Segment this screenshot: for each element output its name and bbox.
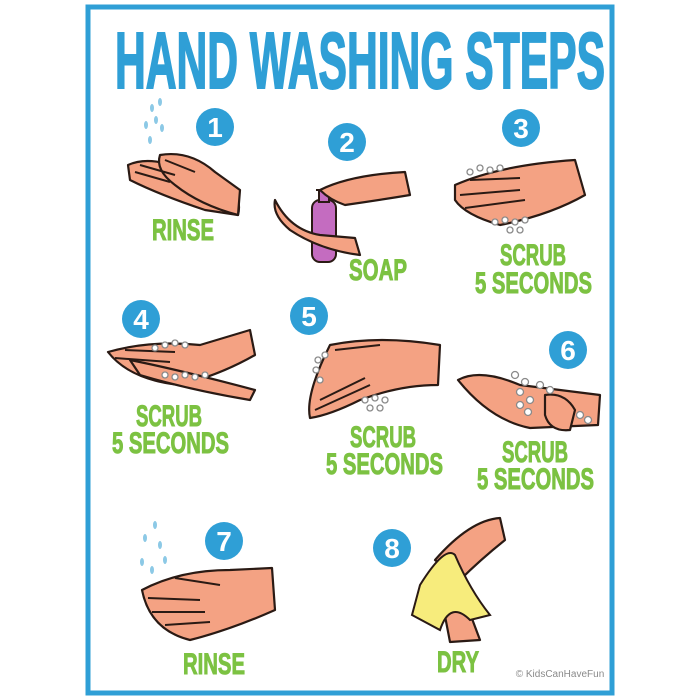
step 7: rinse	[140, 521, 275, 681]
label: scrub 5 seconds: 5 SECONDS	[477, 463, 594, 496]
icon: water drops	[140, 521, 167, 574]
number badge 8	[373, 529, 411, 567]
number badge 5: 5	[301, 301, 317, 332]
label: soap: SOAP	[349, 254, 407, 287]
step 2: soap	[275, 123, 410, 287]
label: scrub 5 seconds: SCRUB	[502, 436, 568, 469]
number badge 5	[290, 297, 328, 335]
number badge 4	[122, 300, 160, 338]
label: scrub 5 seconds	[477, 436, 594, 496]
label: scrub 5 seconds	[326, 421, 443, 481]
label: rinse: RINSE	[152, 214, 214, 247]
icon: towel and hands	[412, 518, 505, 642]
number badge 3: 3	[513, 113, 529, 144]
label: scrub 5 seconds: SCRUB	[350, 421, 416, 454]
step 4	[108, 300, 255, 460]
step 6	[458, 331, 600, 496]
number badge 1: 1	[207, 112, 223, 143]
label: dry: DRY	[437, 646, 479, 679]
icon: water drops	[144, 98, 164, 144]
number badge 7: 7	[216, 526, 232, 557]
number badge 2	[328, 123, 366, 161]
icon: hands interlaced	[108, 330, 255, 400]
label: rinse: RINSE	[183, 648, 245, 681]
frame border	[88, 7, 612, 693]
label: scrub 5 seconds: 5 SECONDS	[475, 267, 592, 300]
step 8: dry	[373, 518, 604, 680]
number badge 6	[549, 331, 587, 369]
step 5	[290, 297, 443, 481]
number badge 7	[205, 522, 243, 560]
number badge 6: 6	[560, 335, 576, 366]
copyright note: © KidsCanHaveFun	[516, 669, 604, 680]
label: scrub 5 seconds: SCRUB	[136, 400, 202, 433]
number badge 8: 8	[384, 533, 400, 564]
icon: hands over back	[309, 340, 440, 418]
label: scrub 5 seconds: 5 SECONDS	[326, 448, 443, 481]
icon: hands rinsing	[142, 568, 275, 640]
number badge 2: 2	[339, 127, 355, 158]
step 3	[455, 109, 592, 300]
icon: hands cupped	[128, 154, 240, 215]
label: scrub 5 seconds	[112, 400, 229, 460]
number badge 1	[196, 108, 234, 146]
label: scrub 5 seconds	[475, 239, 592, 300]
label: scrub 5 seconds: SCRUB	[500, 239, 566, 272]
icon: soap bottle and hands	[275, 172, 410, 262]
step 1: rinse	[128, 98, 240, 247]
number badge 4: 4	[133, 304, 149, 335]
label: scrub 5 seconds: 5 SECONDS	[112, 427, 229, 460]
icon: hands scrubbing	[455, 160, 585, 233]
icon: wrist scrub	[458, 372, 600, 430]
number badge 3	[502, 109, 540, 147]
